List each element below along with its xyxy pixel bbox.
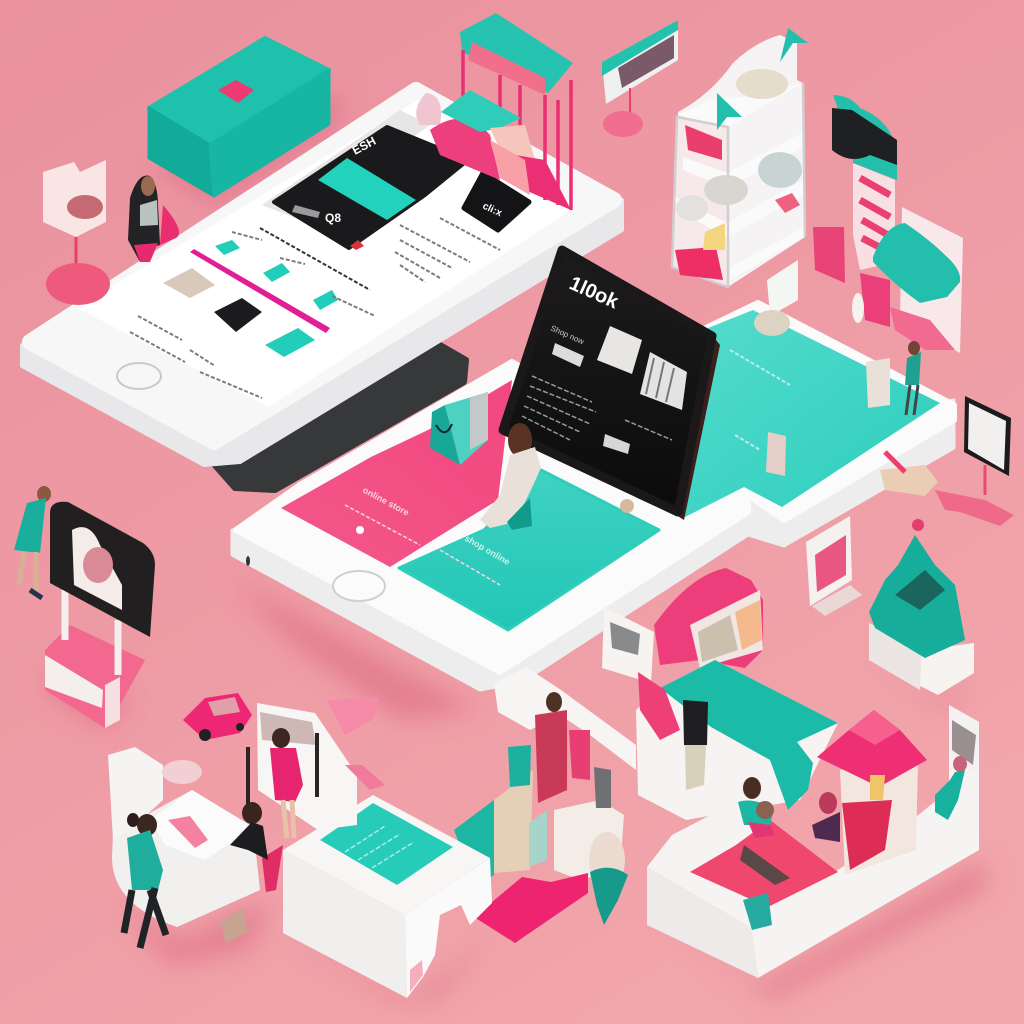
woman in teal far left	[14, 486, 51, 598]
pink booth centre right	[602, 568, 763, 683]
screen product tiles	[163, 240, 338, 357]
clothing tiles	[597, 326, 642, 374]
black upright phone: Shop now	[549, 324, 586, 346]
shelf flags	[780, 28, 808, 62]
pink divider stripe	[190, 249, 330, 333]
woman in black	[230, 802, 283, 892]
top white phone: ESH	[350, 134, 378, 158]
black sign and stall left	[45, 502, 155, 728]
pink parasol kiosk	[817, 710, 927, 875]
home button	[333, 571, 385, 601]
teal band on card	[318, 158, 416, 220]
teal counter platform	[636, 660, 838, 820]
grey band at screen top	[262, 110, 430, 220]
top white phone: cli:x	[481, 201, 504, 219]
monitor sign right	[935, 396, 1014, 526]
figure on teal platform	[866, 341, 921, 415]
right tower display	[813, 95, 963, 353]
phone top face	[236, 303, 954, 672]
woman in pink dress	[270, 728, 303, 838]
dark phone under top phone	[212, 345, 466, 490]
top white phone	[22, 90, 622, 465]
gift boxes right	[880, 452, 938, 496]
lower phone body: shop online	[463, 533, 512, 567]
big white box with teal label	[283, 795, 492, 998]
pink screen panel	[281, 380, 512, 567]
pink toy car	[183, 693, 252, 741]
teal right panel	[678, 310, 940, 517]
black card on screen	[274, 127, 468, 248]
handbag on floor	[220, 908, 248, 943]
teal screen panel	[399, 470, 659, 630]
black upright phone: 1l0ok	[566, 272, 622, 314]
icon: pink box label	[218, 80, 254, 103]
man in teal shirt	[124, 813, 166, 948]
home button	[117, 363, 161, 389]
teal tree display	[869, 519, 974, 695]
platform signs	[754, 260, 798, 476]
people in room	[738, 756, 967, 930]
woman top left	[128, 175, 179, 262]
screen labels: online store	[361, 485, 411, 518]
teal gift box	[149, 38, 329, 196]
top white phone: Q8	[325, 211, 341, 225]
white shelf unit	[672, 28, 808, 287]
bag on screen	[430, 392, 488, 465]
phone screen	[77, 100, 571, 407]
lower phone body	[232, 303, 954, 690]
small black card	[464, 173, 529, 230]
white arch frame	[248, 697, 385, 830]
white connector block	[494, 667, 636, 770]
store mannequins centre	[454, 692, 628, 943]
standing poster right	[806, 516, 862, 616]
bath shaped counter left	[108, 747, 260, 927]
white room lower right	[647, 705, 979, 978]
screen text lines	[130, 218, 500, 398]
market stall on top phone	[416, 13, 573, 210]
sign on stand left	[43, 160, 110, 305]
black upright phone	[503, 250, 720, 520]
walking woman on screen	[480, 423, 541, 530]
phone side walls	[232, 400, 954, 690]
wall poster top centre	[602, 20, 678, 137]
